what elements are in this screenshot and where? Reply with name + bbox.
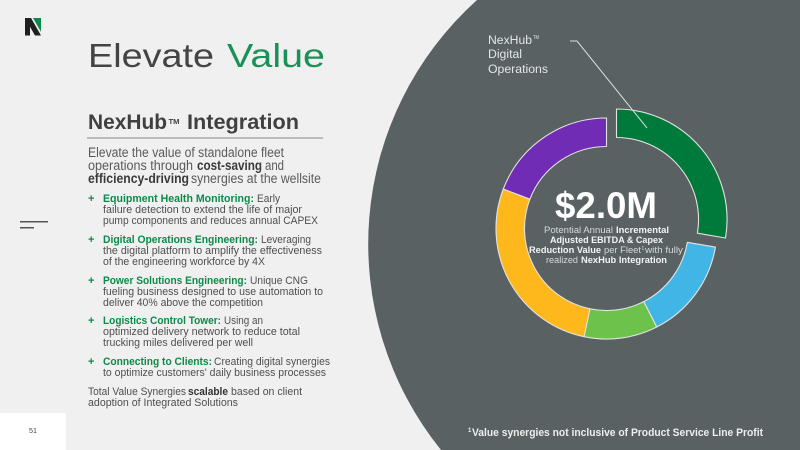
intro paragraph: and (265, 158, 284, 173)
donut centre description: with fully (644, 245, 684, 255)
donut chart (496, 109, 727, 339)
arrow: callout leader line (570, 41, 647, 128)
bullet: logistics control tower: + (88, 315, 94, 327)
bullet: power solutions engineering (88, 275, 323, 309)
closing note (88, 386, 302, 409)
dark circular background panel (368, 0, 800, 450)
closing note: based on client (231, 386, 302, 398)
icon: menu dashes (20, 221, 48, 228)
bullet: logistics control tower: trucking miles delivered per well (103, 337, 253, 349)
donut centre description: Reduction Value (529, 245, 601, 255)
intro paragraph: operations through (88, 158, 193, 173)
footnote: Value synergies not inclusive of Product Service Line Profit (472, 427, 763, 439)
donut centre description: Incremental (616, 225, 669, 235)
intro paragraph: Elevate the value of standalone fleet (88, 145, 284, 160)
callout label (488, 33, 548, 76)
donut centre description: NexHub Integration (581, 255, 667, 265)
bullet: logistics control tower (88, 315, 300, 349)
bullet: connecting to clients (88, 356, 330, 379)
bullet: power solutions engineering: Power Solutions Engineering: (103, 275, 247, 287)
section heading: NexHub (88, 111, 167, 134)
bullet: connecting to clients: to optimize customers' daily business processes (103, 367, 326, 379)
bullet: power solutions engineering: fueling business designed to use automation to (103, 286, 323, 298)
bullet: equipment health monitoring (88, 193, 319, 227)
page number box: 51 (29, 426, 37, 435)
callout label: Operations (488, 62, 548, 76)
title: Elevate (88, 37, 214, 74)
bullet: equipment health monitoring: + (88, 193, 94, 205)
page number box (0, 413, 66, 450)
bullet: digital operations engineering: Digital Operations Engineering: (103, 234, 258, 246)
bullet: logistics control tower: optimized delivery network to reduce total (103, 326, 300, 338)
bullet: power solutions engineering: Unique CNG (250, 275, 308, 287)
footnote: 1 (468, 428, 472, 434)
section heading (88, 111, 299, 134)
segment: yellow (496, 189, 590, 337)
title: Value (227, 37, 325, 74)
donut centre description: 1 (642, 246, 644, 252)
bullet: connecting to clients: Connecting to Clients: (103, 356, 212, 368)
title (88, 37, 325, 74)
intro paragraph: cost-saving (197, 158, 262, 173)
bullet: power solutions engineering: deliver 40% above the competition (103, 297, 263, 309)
segment: light green (584, 302, 657, 339)
bullet: digital operations engineering: the digital platform to amplify the effectiveness (103, 245, 322, 257)
bullet: equipment health monitoring: pump components and reduces annual CAPEX (103, 215, 319, 227)
donut centre description: realized (546, 255, 578, 265)
segment: purple (503, 118, 606, 199)
intro paragraph (88, 145, 321, 186)
section heading: TM (168, 117, 180, 126)
bullet: digital operations engineering: + (88, 234, 94, 246)
donut centre description: per Fleet (604, 245, 642, 255)
closing note: adoption of Integrated Solutions (88, 397, 238, 409)
bullet: equipment health monitoring: failure detection to extend the life of major (103, 204, 302, 216)
bullet: logistics control tower: Using an (224, 315, 263, 327)
intro paragraph: efficiency-driving (88, 171, 189, 186)
section heading: Integration (187, 111, 299, 134)
bullet: connecting to clients: + (88, 356, 94, 368)
callout label: Digital (488, 47, 522, 61)
donut centre description: Potential Annual (544, 225, 613, 235)
closing note: scalable (188, 386, 228, 398)
donut centre value: $2.0M (555, 185, 657, 226)
segment: NexHub digital operations (dark green, exploded) (616, 109, 727, 238)
bullet: equipment health monitoring: Equipment Health Monitoring: (103, 193, 254, 205)
donut centre description: Adjusted EBITDA & Capex (550, 235, 663, 245)
bullet: digital operations engineering: of the engineering workforce by 4X (103, 256, 266, 268)
donut centre description (529, 225, 684, 265)
intro paragraph: synergies at the wellsite (191, 171, 321, 186)
bullet: digital operations engineering: Leveraging (261, 234, 311, 246)
bullet: digital operations engineering (88, 234, 322, 268)
bullet: connecting to clients: Creating digital synergies (214, 356, 330, 368)
callout label: TM (533, 35, 539, 41)
bullet: equipment health monitoring: Early (257, 193, 280, 205)
segment: blue (644, 242, 715, 327)
bullet: power solutions engineering: + (88, 275, 94, 287)
callout label: NexHub (488, 33, 532, 47)
closing note: Total Value Synergies (88, 386, 186, 398)
icon: company logo (25, 18, 41, 36)
bullet: logistics control tower: Logistics Control Tower: (103, 315, 221, 327)
